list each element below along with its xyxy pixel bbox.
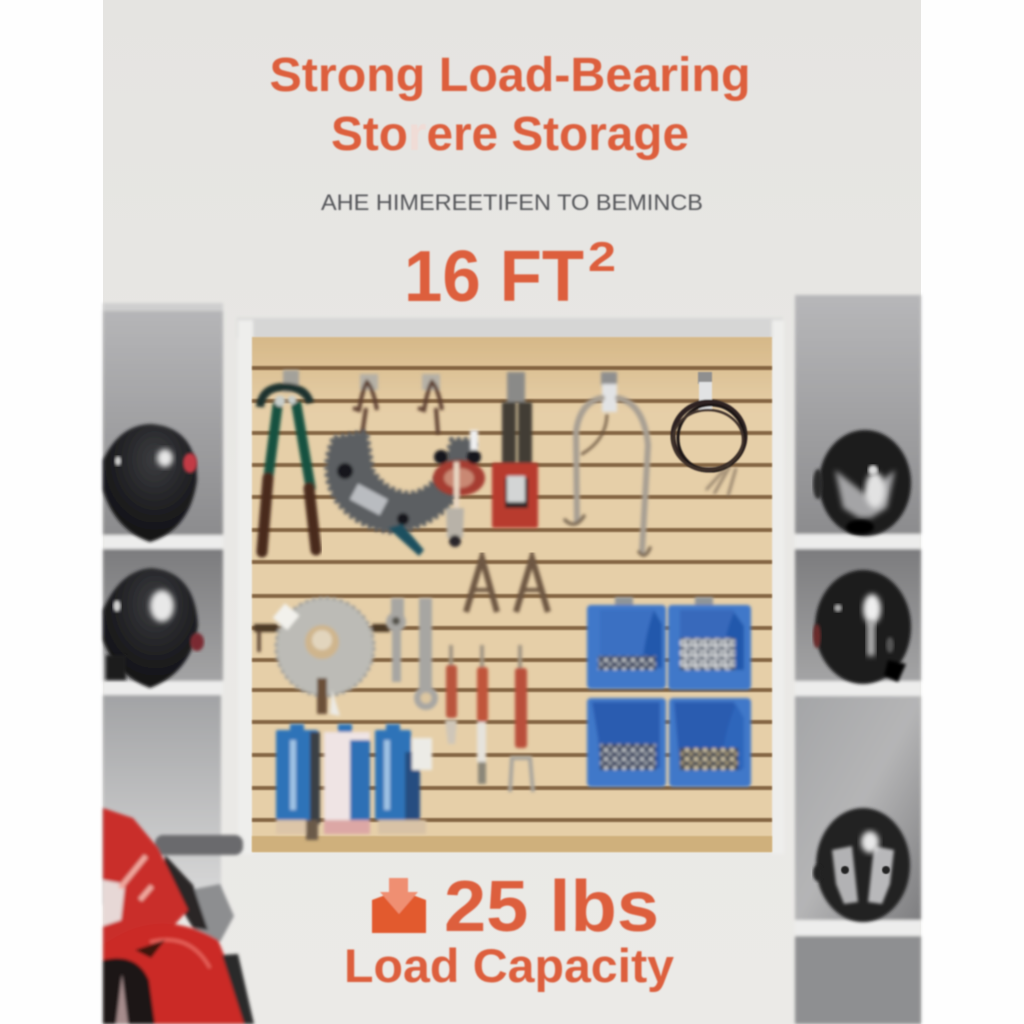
icon: blue bin top right bbox=[668, 597, 751, 690]
title: Strong Load-Bearing bbox=[270, 49, 750, 102]
icon: helmet right middle bbox=[813, 570, 911, 684]
icon: red clamp tool bbox=[433, 430, 485, 547]
icon: helmet right top bbox=[813, 430, 911, 536]
load value: 25 lbs bbox=[444, 867, 659, 947]
icon: blue bin top left bbox=[587, 597, 666, 689]
icon: helmet left top bbox=[103, 424, 197, 542]
icon: large wire hook bbox=[565, 372, 650, 555]
panel: left shelving bbox=[103, 303, 223, 905]
icon: coiled cable bbox=[673, 372, 745, 496]
icon: helmet right bottom bbox=[813, 808, 910, 922]
icon: helmet left middle bbox=[103, 568, 204, 688]
title bbox=[270, 49, 750, 161]
icon: red motorcycle gear with handlebar bbox=[103, 808, 254, 1024]
icon: circular saw disc bbox=[254, 598, 390, 716]
icon: hooks over saw bbox=[353, 374, 442, 435]
title: Storere Storage bbox=[331, 108, 689, 161]
icon: blue bin bottom right bbox=[669, 698, 751, 787]
icon: red-handled hand tools bbox=[445, 645, 533, 792]
icon: red hanger with strap bbox=[492, 372, 538, 528]
area figure: 2 bbox=[588, 233, 616, 280]
icon: blue bin bottom left bbox=[587, 698, 666, 787]
panel: recessed frame bbox=[237, 318, 784, 854]
icon: wrenches bbox=[386, 598, 438, 710]
panel: slatwall board bbox=[252, 337, 772, 852]
load caption: Load Capacity bbox=[344, 939, 674, 992]
subtitle: AHE HIMEREETIFEN TO BEMINCB bbox=[321, 190, 703, 215]
icon: curved saw blade bbox=[327, 432, 475, 556]
icon: blue packaged items bbox=[276, 724, 432, 840]
area figure: 16 FT bbox=[404, 237, 584, 317]
panel: right shelving bbox=[795, 295, 921, 1024]
icon: load arrow bbox=[372, 878, 426, 933]
wall panel bbox=[103, 0, 921, 1024]
icon: bolt cutters bbox=[260, 370, 316, 552]
icon: small pliers pair bbox=[466, 558, 548, 612]
